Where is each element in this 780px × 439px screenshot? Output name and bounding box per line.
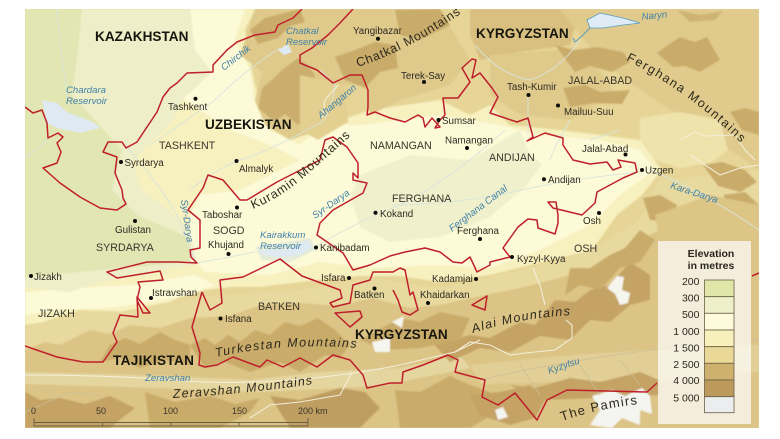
city markers and names: Ferghana (457, 226, 499, 237)
city markers and names: Kyzyl-Kyya (517, 254, 566, 265)
mountain labels: The Pamirs (560, 396, 637, 420)
enclave: Alai (472, 296, 487, 310)
city markers and names: Uzgen (645, 166, 673, 176)
water labels: Chirchik (219, 43, 254, 73)
city markers and names: Taboshar (202, 210, 243, 221)
legend values: 4 000 (673, 375, 700, 387)
lake: Kairakkum Reservoir (257, 240, 312, 257)
water labels: Chardara (66, 85, 106, 96)
mountain labels: Turkestan Mountains (216, 338, 356, 356)
scale bar: 100 (163, 406, 178, 416)
scale bar: 200 km (298, 406, 328, 416)
city markers and names: Terek-Say (401, 71, 445, 82)
country labels: TAJIKISTAN (113, 353, 194, 368)
city markers and names: Almalyk (239, 164, 273, 175)
region labels: JIZAKH (38, 308, 75, 320)
scale bar (31, 406, 328, 426)
legend values (673, 276, 700, 404)
legend values: 500 (682, 309, 700, 321)
country labels: KYRGYZSTAN (355, 327, 448, 342)
legend values: 200 (682, 276, 700, 288)
legend title: in metres (688, 260, 735, 272)
city markers and names: Gulistan (115, 225, 151, 236)
water labels: Ahangaron (315, 83, 359, 122)
scale bar: 0 (31, 406, 36, 416)
water labels: Reservoir (66, 96, 108, 107)
border: Kazakhstan and Uzbekistan (25, 9, 302, 210)
water labels: Naryn (641, 9, 668, 23)
legend values: 300 (682, 292, 700, 304)
city markers and names: Tash-Kumir (507, 82, 557, 93)
city markers and names: Jalal-Abad (582, 144, 628, 155)
border: Tajikistan and Kyrgyzstan south (192, 292, 657, 420)
country labels: KAZAKHSTAN (95, 29, 188, 44)
city markers and names: Kanibadam (320, 243, 370, 254)
water labels: Ferghana Canal (447, 183, 511, 234)
legend panel: elevation in metres (658, 241, 751, 424)
north and central mountains (240, 9, 470, 140)
city markers and names: Jizakh (34, 272, 62, 283)
lake: Chatkal Reservoir (278, 44, 292, 55)
water labels: Syr-Darya (310, 188, 352, 221)
city markers and names: Mailuu-Suu (564, 107, 614, 118)
city markers and names: Kadamjai (432, 274, 473, 285)
city markers and names: Isfara (321, 273, 346, 284)
city markers and names: Khaidarkan (420, 290, 470, 301)
country labels: KYRGYZSTAN (476, 26, 569, 41)
lake: Naryn reservoir (587, 13, 640, 28)
mountain labels (172, 9, 744, 420)
water labels: Reservoir (286, 37, 328, 48)
city markers and names: Kokand (380, 209, 413, 220)
mountain labels: Ferghana Mountains (627, 52, 744, 142)
border: east edge (752, 273, 759, 276)
south and east mountains (46, 248, 592, 322)
rivers (25, 9, 759, 263)
legend values: 1 000 (673, 326, 700, 338)
water labels: Reservoir (260, 241, 302, 252)
border: Batken (202, 259, 418, 315)
city markers and names: Yangibazar (353, 26, 403, 37)
water labels: Kairakkum (260, 230, 305, 241)
water labels (66, 9, 719, 384)
region labels: SYRDARYA (96, 242, 155, 254)
scale bar: 150 (232, 406, 247, 416)
mountain labels: Kuramin Mountains (250, 132, 350, 209)
city markers and names: Isfana (225, 314, 252, 325)
region labels (38, 75, 632, 320)
legend values: 2 500 (673, 359, 700, 371)
region labels: OSH (574, 243, 597, 255)
legend colour scale (704, 280, 734, 413)
city markers and names: Istravshan (152, 288, 197, 299)
city markers and names: Andijan (548, 175, 581, 186)
legend values: 5 000 (673, 392, 700, 404)
scale bar: 50 (96, 406, 106, 416)
mountain labels: Chatkal Mountains (356, 9, 460, 66)
mountain labels: Zeravshan Mountains (172, 377, 312, 398)
country labels: UZBEKISTAN (205, 117, 292, 132)
mountain labels: Alai Mountains (472, 307, 570, 334)
legend background (658, 241, 751, 424)
city markers and names: Sumsar (442, 116, 476, 127)
enclave: Sokh (335, 311, 362, 327)
country labels (95, 26, 569, 368)
water labels: Chatkal (286, 26, 319, 37)
city markers and names: Tashkent (168, 102, 207, 113)
river: Naryn (573, 28, 590, 42)
water labels: Zeravshan (144, 373, 190, 384)
city markers and names: Syrdarya (124, 158, 164, 169)
region labels: SOGD (213, 225, 245, 237)
region labels: TASHKENT (159, 140, 216, 152)
city markers and names: Khujand (208, 240, 244, 251)
region labels: FERGHANA (392, 193, 452, 205)
lake: Chardara Reservoir (42, 100, 100, 133)
region labels: JALAL-ABAD (568, 75, 632, 87)
city markers and names (29, 26, 673, 325)
water labels: Kara-Darya (669, 180, 719, 206)
snow patches (590, 388, 652, 428)
legend values: 1 500 (673, 342, 700, 354)
legend title: Elevation (688, 248, 734, 260)
water labels: Syr-Darya (178, 199, 195, 243)
border: Uzbekistan, Kyrgyzstan and Tajikistan (25, 9, 637, 362)
region labels: BATKEN (258, 301, 300, 313)
region labels: NAMANGAN (370, 140, 432, 152)
city markers and names: Namangan (445, 136, 493, 146)
water labels: Kyzylsu (546, 355, 582, 377)
region labels: ANDIJAN (489, 152, 535, 164)
city markers and names: Osh (583, 216, 601, 227)
city markers and names: Batken (354, 290, 385, 301)
